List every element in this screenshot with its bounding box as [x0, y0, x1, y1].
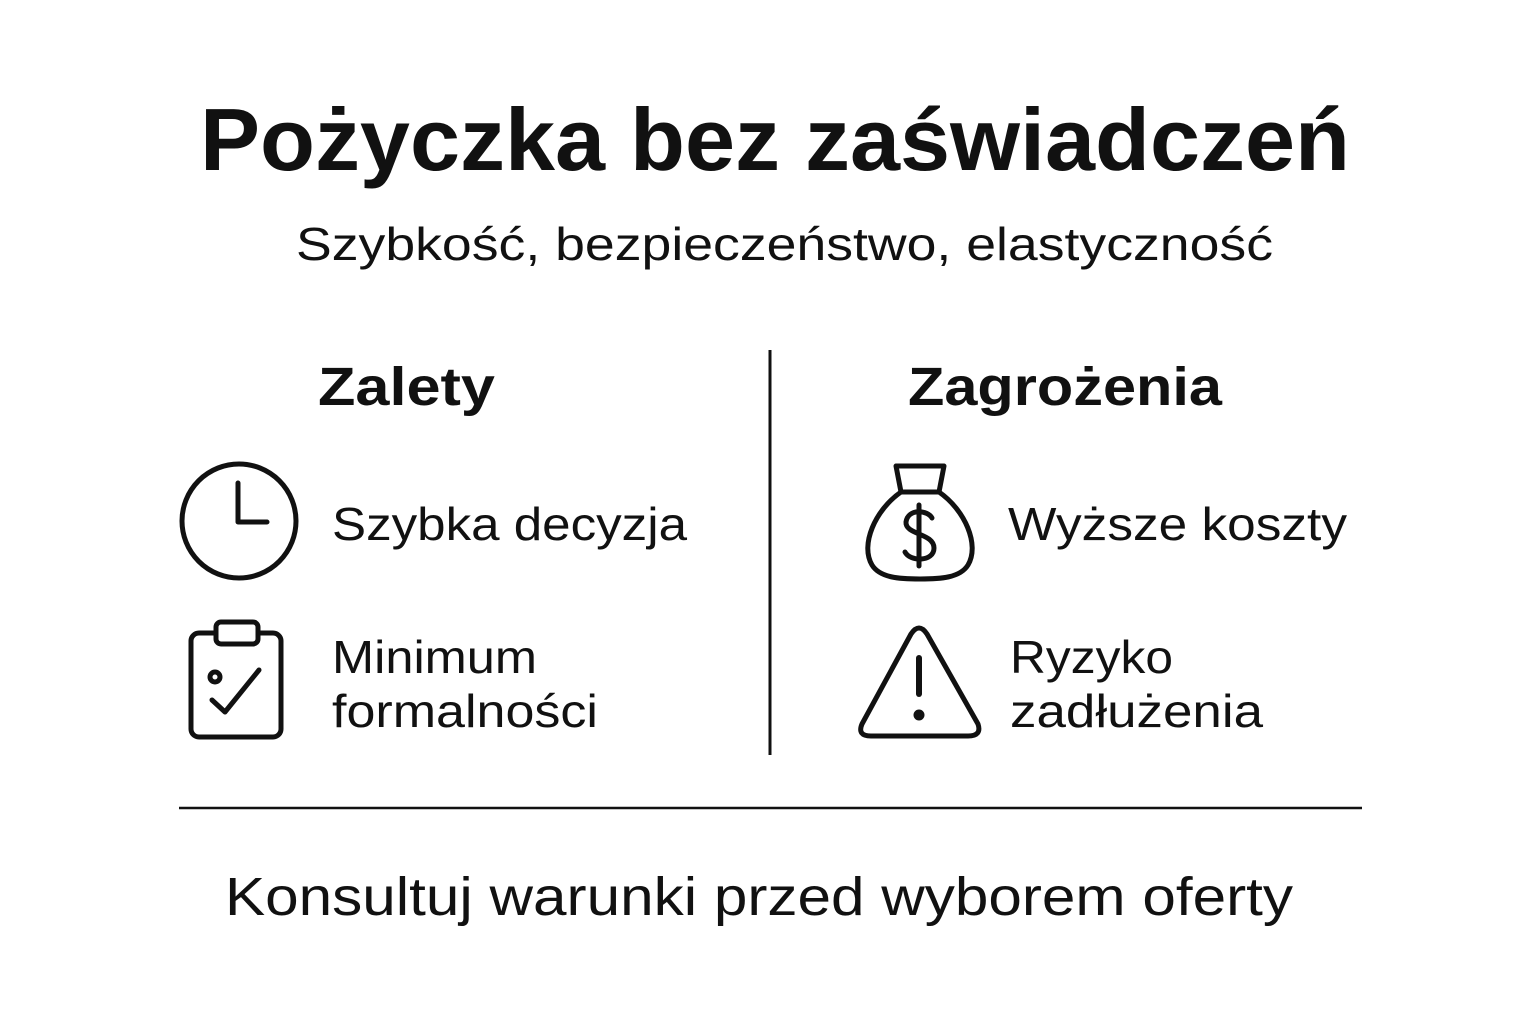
- footer text: Konsultuj warunki przed wyborem oferty: [225, 867, 1293, 927]
- heading: Zalety: Zalety: [318, 357, 495, 417]
- text: Szybka decyzja: Szybka decyzja: [332, 498, 687, 550]
- panel: zalety: [182, 357, 687, 737]
- icon: warning triangle: [861, 628, 979, 736]
- heading: Zagrożenia: Zagrożenia: [908, 357, 1223, 417]
- icon: clipboard: [191, 622, 281, 737]
- text: Wyższe koszty: Wyższe koszty: [1008, 498, 1347, 550]
- panel: zagrozenia: [861, 357, 1347, 737]
- icon: clock: [182, 464, 296, 578]
- divider vertical: [768, 350, 772, 755]
- text: Minimum formalności: Minimum: [332, 631, 537, 683]
- text: Ryzyko zadłużenia: Ryzyko: [1010, 631, 1173, 683]
- divider horizontal: [179, 807, 1362, 809]
- text: Minimum formalności: formalności: [332, 685, 598, 737]
- title: Pożyczka bez zaświadczeń: [200, 90, 1350, 189]
- text: Ryzyko zadłużenia: zadłużenia: [1010, 685, 1263, 737]
- icon: money bag: [868, 466, 972, 579]
- subtitle: Szybkość, bezpieczeństwo, elastyczność: [296, 218, 1273, 270]
